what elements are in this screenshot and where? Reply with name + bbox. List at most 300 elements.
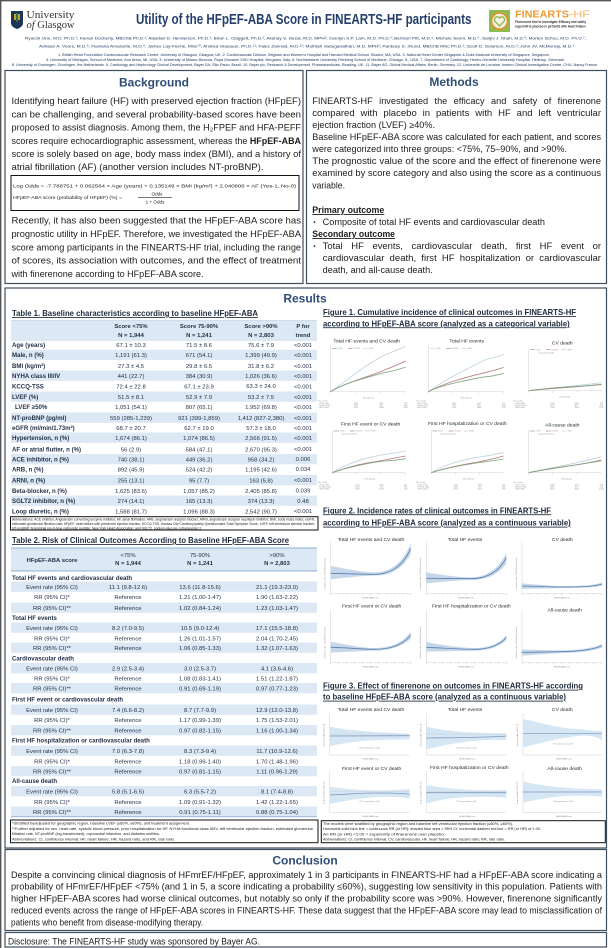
panel: disclosure: Disclosure: The FINEARTS-HF study was sponsored by Bayer AG. — [8, 936, 260, 946]
table 1: baseline characteristics: 892 (45.9) — [118, 468, 144, 474]
chart: first HF event or CV death: HFpEF-ABA score — [363, 815, 380, 818]
chart: total HF events and CV death: HFpEF-ABA score — [363, 758, 380, 761]
table 1: baseline characteristics: AF or atrial flutter, n (%) — [12, 446, 81, 453]
panel: results — [5, 288, 606, 848]
chart: all-cause death: >90% — [567, 430, 572, 433]
chart: total HF events: 1015 — [501, 407, 507, 409]
table 2: risk of clinical outcomes: 75-90% — [190, 553, 211, 559]
chart: first HF hospitalization or CV death: First HF hospitalization or CV death — [428, 421, 507, 427]
chart: total HF events and CV death: 498 — [404, 405, 408, 407]
affiliations: 4. University of Michigan, School of Medicine, Ann Arbor, MI, USA. 5. University of Milano-Bicocca, Papa Giovanni XXIII Hospital, Bergamo, Italy. 6. Northwestern University Feinberg School of Medicine, Chicago, IL, USA. 7. Department of Cardiology, Herlev-Gentofte University Hospital, Hellerup, Denmark. — [46, 58, 565, 62]
chart: total HF events and CV death: 1153 — [354, 405, 359, 407]
table 2: risk of clinical outcomes: 1.18 (0.99-1.40) — [179, 759, 221, 765]
logo: University of Glasgow: of Glasgow — [26, 19, 75, 31]
chart: first HF event or CV death: First HF event or CV death — [342, 766, 402, 772]
title: Utility of the HFpEF-ABA Score in FINEARTS-HF participants — [136, 12, 472, 28]
table 2: risk of clinical outcomes: N = 2,803 — [264, 561, 291, 567]
chart: all-cause death: Incidence rate (/ 100 Patient-Years) — [515, 627, 518, 658]
text block: conclusion: Despite a convincing clinical diagnosis of HFmrEF/HFpEF, approximately 1 in 3 participants in FINEARTS-HF had a HFpEF-ABA score indicating a — [11, 870, 602, 880]
chart: all-cause death: HFpEF-ABA score — [554, 666, 571, 669]
table 1: baseline characteristics: 1,057 (85.2) — [183, 489, 215, 495]
chart: first HF hospitalization or CV death: Log-rank p<0.001 — [440, 433, 456, 436]
text block: methods description: The prognostic value of the score and the effect of finerenone were — [312, 156, 601, 166]
table 2: risk of clinical outcomes: 0.91 (0.69-1.19) — [179, 687, 221, 693]
table 1: baseline characteristics: LVEF (%) — [12, 394, 38, 401]
table 2: risk of clinical outcomes: 1.16 (1.00-1.34) — [256, 728, 298, 734]
table 2 footnote: filtration rate, NT-proBNP (log-transformed), myocardial infarction, and diabetes mellitus. — [12, 832, 160, 836]
chart: first HF hospitalization or CV death: 799 — [502, 488, 506, 490]
table 2: risk of clinical outcomes: Reference — [114, 769, 142, 775]
table 1: baseline characteristics: ACE inhibitor, n (%) — [12, 457, 69, 464]
formula box: Odds — [152, 192, 163, 196]
chart: CV death: Time (years) — [559, 396, 571, 399]
chart: all-cause death: 1060 — [599, 488, 604, 490]
chart: first HF event or CV death: P for interaction = 0.90 — [360, 800, 381, 803]
table 2: risk of clinical outcomes: 8.3 (7.3-9.4) — [184, 749, 216, 755]
text block: conclusion: patients who benefit from disease-modifying therapy. — [11, 917, 203, 927]
figure 1 title — [323, 307, 576, 328]
table 1: baseline characteristics: <0.001 — [294, 436, 312, 442]
table 2: risk of clinical outcomes: 1.11 (0.96-1.29) — [256, 769, 298, 775]
table 2: risk of clinical outcomes: First HF hospitalization or cardiovascular death — [12, 737, 150, 744]
table 2: risk of clinical outcomes: Reference — [114, 595, 142, 601]
table 2: risk of clinical outcomes: 5.8 (5.1-6.5) — [112, 790, 144, 796]
text block: primary outcome: Primary outcome — [312, 205, 384, 215]
figure 3 title: to baseline HFpEF-ABA score (analyzed as a continuous variable) — [323, 692, 566, 702]
table 2: risk of clinical outcomes: 21.1 (19.3-23.0) — [256, 585, 298, 591]
table 2: risk of clinical outcomes: RR (95% CI)* — [34, 677, 71, 683]
formula box: 1 + Odds — [146, 200, 165, 204]
table 2: risk of clinical outcomes: Event rate (95% CI) — [26, 667, 78, 673]
chart: CV death: 1153 — [550, 405, 555, 407]
table 1: baseline characteristics: <0.001 — [294, 353, 312, 359]
chart: first HF event or CV death: 392 — [404, 486, 407, 488]
table 1: baseline characteristics: Score >90% — [244, 324, 278, 330]
table 1: baseline characteristics: ARNI, n (%) — [12, 478, 45, 485]
chart: all-cause death: <75% — [535, 430, 541, 433]
chart: first HF hospitalization or CV death: 2291 — [453, 488, 458, 490]
chart: all-cause death: 75-90% — [551, 431, 558, 433]
table 2: risk of clinical outcomes: All-cause death — [12, 778, 57, 785]
chart: first HF hospitalization or CV death: Time (years) — [462, 478, 474, 481]
table 2: risk of clinical outcomes: Total HF events and cardiovascular death — [12, 575, 132, 582]
table 1: baseline characteristics: 72.4 ± 22.8 — [116, 385, 146, 391]
text block: background intro: scores require echocardiographic assessment, whereas the HFpEF-ABA — [12, 136, 302, 146]
table 2: risk of clinical outcomes: RR (95% CI)* — [34, 595, 71, 601]
chart: first HF hospitalization or CV death: <75% 1944 — [417, 483, 428, 486]
chart: all-cause death — [514, 423, 604, 490]
chart: total HF events and CV death: Treatment effect (95% CI) — [323, 724, 326, 747]
table 1: baseline characteristics: N = 2,803 — [248, 333, 275, 339]
text block: methods description: were categorized into three groups: <75%, 75–90%, and >90%. — [311, 144, 567, 154]
chart: first HF event or CV death: >90% — [370, 430, 376, 433]
chart: all-cause death: No. at risk — [514, 481, 523, 484]
chart: total HF events: >90% — [467, 347, 472, 350]
table 2: risk of clinical outcomes: 0.97 (0.77-1.23) — [256, 687, 298, 693]
table 2: risk of clinical outcomes: 1.17 (0.99-1.39) — [179, 718, 221, 724]
table 1: baseline characteristics: 807 (65.1) — [186, 405, 212, 411]
chart: total HF events: Total HF events — [448, 707, 483, 713]
table 1: baseline characteristics: 75.6 ± 7.9 — [248, 343, 274, 349]
table 2: risk of clinical outcomes: HFpEF-ABA score — [27, 558, 78, 564]
table 1: baseline characteristics: 0.48 — [297, 499, 309, 505]
chart: CV death: <75% — [535, 348, 541, 351]
table 1: baseline characteristics: <0.001 — [294, 364, 312, 370]
table 1: baseline characteristics: <0.001 — [294, 478, 312, 484]
table 2: risk of clinical outcomes: 1.75 (1.53-2.01) — [256, 718, 298, 724]
table 2: risk of clinical outcomes: Event rate (95% CI) — [26, 626, 78, 632]
table 1: baseline characteristics: LVEF ≥50% — [15, 404, 48, 411]
table 2: risk of clinical outcomes: N = 1,944 — [115, 561, 142, 567]
table 2: risk of clinical outcomes: Event rate (95% CI) — [26, 708, 78, 714]
chart: total HF events: <75% 1944 — [417, 402, 428, 405]
text block: conclusion: probability of HFmrEF/HFpEF <75% (and 1 in 5, a score indicating a probability ≤60%), suggesting low sensitivity in this population. Patients with — [11, 882, 602, 892]
figure 3 title: Figure 3. Effect of finerenone on outcomes in FINEARTS-HF according — [323, 681, 583, 691]
figure 3: effect of finerenone — [321, 681, 605, 843]
table 1: baseline characteristics: Beta-blocker, n (%) — [12, 488, 67, 495]
chart: CV death: CV death — [552, 707, 573, 713]
chart: CV death: P for interaction = 0.93 — [553, 742, 574, 745]
chart: first HF hospitalization or CV death: Incidence rate (/ 100 Patient-Years) — [419, 627, 422, 658]
formula box: Log Odds = -7.788751 + 0.062564 × Age (years) + 0.135149 × BMI (kg/m²) + 2.040806 × AF (Yes-1, No-0) — [13, 184, 297, 188]
text block: primary outcome — [312, 205, 545, 227]
figure 2 charts — [323, 537, 603, 669]
table 1: baseline characteristics: 2,405 (85.8) — [245, 489, 277, 495]
figure 3 charts — [323, 707, 602, 818]
table 1 footnote: estimated glomerular filtration rate; HFpEF, heart failure with preserved ejection fraction; KCCQ-TSS, Kansas City Cardiomyopathy Questionnaire-Total Symptom Score; LVEF, left ventricular ejection fraction; — [12, 522, 315, 526]
table 2: risk of clinical outcomes: RR (95% CI)** — [33, 728, 72, 734]
chart: first HF event or CV death: 75-90% 1241 — [319, 486, 331, 488]
chart: total HF events and CV death: >90% — [368, 347, 374, 350]
chart: first HF event or CV death: Incidence rate (/ 100 Patient-Years) — [323, 627, 326, 658]
table 1: baseline characteristics: <0.001 — [294, 405, 312, 411]
chart: CV death: >90% 2803 — [515, 406, 526, 409]
chart: first HF event or CV death: Time (years) — [364, 478, 376, 481]
heading: methods: Methods — [429, 75, 479, 89]
chart: total HF events and CV death: Total HF events and CV death — [338, 537, 404, 543]
table 2: risk of clinical outcomes: Reference — [114, 646, 142, 652]
chart: first HF hospitalization or CV death: 75-90% 1241 — [417, 486, 429, 488]
chart: CV death: >90% — [567, 348, 572, 351]
table 1 footnote: Abbreviations: ACE inhibitor, Angiotensin converting enzyme inhibitor; AF, atrial fibrillation; ARB, angiotensin receptor blocker; ARNI, angiotensin receptor neprilysin inhibitor; BMI, body mass index; eGFR, — [12, 518, 315, 522]
chart: first HF hospitalization or CV death: No. at risk — [416, 481, 425, 484]
table 1: baseline characteristics: <0.001 — [294, 343, 312, 349]
table 1: baseline characteristics: Male, n (%) — [12, 352, 44, 359]
text block: secondary outcome: Total HF events, cardiovascular death, first HF event or — [323, 241, 601, 251]
table 2: risk of clinical outcomes: RR (95% CI)** — [33, 810, 72, 816]
chart: CV death: HFpEF-ABA score — [556, 758, 573, 761]
chart: first HF event or CV death — [323, 604, 411, 669]
table 2: risk of clinical outcomes: Reference — [114, 728, 142, 734]
logo: University of Glasgow: University — [26, 9, 75, 21]
table 2: risk of clinical outcomes: RR (95% CI)* — [34, 718, 71, 724]
chart: first HF event or CV death: 641 — [404, 484, 407, 486]
table 2: risk of clinical outcomes: 13.6 (11.8-15.6) — [179, 585, 221, 591]
logo: FINEARTS-HF: FINEARTS — [515, 10, 569, 20]
table 1: baseline characteristics: 374 (13.3) — [248, 499, 274, 505]
chart: all-cause death: All-cause death — [545, 423, 580, 429]
table 1 footnote — [10, 517, 318, 530]
table 1: baseline characteristics: 255 (13.1) — [118, 479, 144, 485]
chart: all-cause death: All-cause death — [547, 766, 582, 772]
chart: first HF hospitalization or CV death: >90% 2803 — [417, 487, 428, 490]
table 2: risk of clinical outcomes: 7.4 (6.6-8.2) — [112, 708, 144, 714]
figure 3 footnote: The models were stratified by geographic region and baseline left ventricular ejection fraction (≤60%, ≥60%). — [323, 822, 513, 826]
chart: total HF events and CV death: Time (years) — [362, 397, 374, 400]
table 1: baseline characteristics: 1,399 (49.9) — [245, 353, 277, 359]
table 2: risk of clinical outcomes: Total HF events — [12, 615, 58, 622]
text block: methods description: Baseline HFpEF-ABA score was calculated for each patient, and scores — [312, 132, 602, 142]
chart: total HF events: HFpEF-ABA score — [459, 758, 476, 761]
chart: total HF events: Incidence rate (/ 100 Patient-Years) — [419, 558, 422, 589]
table 2: risk of clinical outcomes: 8.2 (7.0-9.5) — [112, 626, 144, 632]
table 2: risk of clinical outcomes: 1.42 (1.22-1.65) — [256, 800, 298, 806]
table 2: risk of clinical outcomes: 1.23 (1.03-1.47) — [256, 606, 298, 612]
figure 1 title: according to HFpEF-ABA score (analyzed as a categorical variable) — [323, 318, 570, 328]
table 1: baseline characteristics: 67.1 ± 23.9 — [184, 385, 214, 391]
table 2 footnote: *Stratified by/adjusted for geographic region, baseline LVEF (≥60%, ≥60%), and treatment assignment. — [12, 822, 190, 826]
chart: CV death: 1810 — [550, 403, 555, 405]
chart: total HF events and CV death — [319, 338, 409, 409]
chart: first HF hospitalization or CV death: HFpEF-ABA score — [459, 815, 476, 818]
table 1: baseline characteristics: 524 (42.2) — [186, 468, 212, 474]
text block: background aim: prognostic utility in HFpEF. Therefore, we investigated the HFpEF-ABA — [12, 229, 301, 239]
table 1: baseline characteristics: 51.5 ± 8.1 — [118, 395, 144, 401]
chart: first HF hospitalization or CV death: 408 — [502, 486, 506, 488]
table 2: risk of clinical outcomes: 7.0 (6.3-7.8) — [112, 749, 144, 755]
chart: first HF hospitalization or CV death: First HF hospitalization or CV death — [430, 765, 509, 771]
chart: all-cause death: 75-90% 1241 — [515, 486, 526, 488]
chart: all-cause death: Log-rank p<0.001 — [538, 433, 554, 436]
text block: background aim: score among participants in the FINEARTS-HF trial, including the range — [12, 243, 301, 253]
heading: results: Results — [283, 292, 327, 306]
chart: first HF hospitalization or CV death: 1749 — [453, 484, 459, 486]
table 1: baseline characteristics: 67.1 ± 10.3 — [116, 343, 146, 349]
table 2: risk of clinical outcomes: Event rate (95% CI) — [26, 585, 78, 591]
text block: secondary outcome: death, and all-cause death. — [323, 265, 433, 275]
chart: total HF events: 1810 — [452, 403, 457, 405]
chart: total HF events: HFpEF-ABA score — [458, 597, 475, 600]
chart: total HF events: 897 — [477, 405, 481, 407]
logo: FINEARTS-HF — [489, 10, 590, 32]
table 1: baseline characteristics: 1,026 (36.6) — [245, 374, 277, 380]
table 2: risk of clinical outcomes: First HF event or cardiovascular death — [12, 697, 123, 704]
table 1: baseline characteristics: 163 (5.8) — [249, 479, 273, 485]
chart: total HF events — [419, 707, 506, 761]
chart: first HF event or CV death: <75% 1944 — [319, 483, 330, 486]
chart: first HF event or CV death: 750 — [404, 488, 408, 490]
table 1: baseline characteristics: trend — [296, 333, 311, 339]
chart: CV death: CV death — [552, 341, 573, 347]
table 1: baseline characteristics: <0.001 — [294, 509, 312, 515]
authors: Ryuichi Ono, M.D. Ph.D.¹; Kieran Docherty, MBChB Ph.D.¹; Alasdair D. Henderson, Ph.D.¹; Brian L. Claggett, Ph.D.²; Akshay S. Desai, M.D. MPH²; Carolyn S.P. Lam, M.D. Ph.D.³; Bertram Pitt, M.D.⁴; Michele Senni, M.D.⁵; Sanjiv J. Shah, M.D.⁶; Morten Schou, M.D. Ph.D.⁷; — [25, 36, 586, 40]
chart: first HF event or CV death: Log-rank p<0.001 — [341, 433, 357, 436]
chart: total HF events and CV death: 1015 — [403, 407, 409, 409]
chart: total HF events and CV death: P for interaction = 0.85 — [360, 747, 381, 750]
table 1: baseline characteristics: 31.8 ± 6.2 — [248, 364, 274, 370]
table 2: risk of clinical outcomes: <75% — [120, 553, 136, 559]
chart: first HF event or CV death: Treatment effect (95% CI) — [323, 781, 326, 804]
authors — [25, 36, 586, 48]
panel: methods — [306, 70, 606, 284]
table 1: baseline characteristics: NT-proBNP (pg/ml) — [12, 415, 66, 422]
chart: all-cause death: 516 — [600, 486, 604, 488]
table 1: baseline characteristics: 1,674 (86.1) — [115, 436, 147, 442]
chart: all-cause death: 1943 — [574, 488, 580, 490]
table 1: baseline characteristics: <0.001 — [294, 426, 312, 432]
chart: total HF events — [417, 338, 507, 409]
chart: CV death: Incidence rate (/ 100 Patient-Years) — [515, 558, 518, 589]
table 1: baseline characteristics: 0.006 — [296, 457, 311, 463]
text block: methods description: examined by score category and also using the score as a continuous — [312, 168, 602, 178]
table 1: baseline characteristics: 671 (54.1) — [186, 353, 212, 359]
chart: CV death: No. at risk — [514, 399, 523, 402]
chart: total HF events and CV death: 2516 — [353, 407, 359, 409]
table 2: risk of clinical outcomes: 17.1 (15.5-18.8) — [256, 626, 298, 632]
chart: total HF events: 75-90% 1241 — [417, 405, 428, 407]
chart: first HF hospitalization or CV death: P for interaction = 0.87 — [456, 800, 476, 803]
chart: total HF events and CV death: No. at risk — [319, 399, 328, 402]
chart: total HF events and CV death: 75-90% — [353, 348, 360, 350]
figure 3 footnote: Horizontal solid blue line = continuous RR (or HR); shaded blue area = 95% CI; horizontal dashed red line = RR (or HR) of 1.00. — [323, 827, 541, 831]
table 1: baseline characteristics: 95 (7.7) — [189, 479, 209, 485]
table 1: baseline characteristics: <0.001 — [294, 447, 312, 453]
table 1: baseline characteristics: Hypertension, n (%) — [12, 435, 69, 442]
table 1: baseline characteristics: 559 (285-1,239) — [110, 416, 152, 422]
chart: total HF events: 776 — [502, 403, 506, 405]
chart: total HF events: >90% 2803 — [417, 406, 428, 409]
table 2 footnote: **Further adjusted for sex, heart rate, systolic blood pressure, prior hospitalization for HF, NYHA functional class III/IV, left ventricular ejection fraction, estimated glomerular — [12, 827, 314, 831]
text block: methods description: ejection fraction (LVEF) ≥40%. — [312, 120, 435, 130]
table 2: risk of clinical outcomes: 10.5 (9.0-12.4) — [181, 626, 219, 632]
chart: total HF events: 498 — [502, 405, 506, 407]
table 1: baseline characteristics: BMI (kg/m²) — [12, 363, 45, 370]
heading: conclusion: Conclusion — [272, 854, 338, 868]
chart: total HF events: 1401 — [477, 403, 481, 405]
table 2: risk of clinical outcomes: Reference — [114, 677, 142, 683]
chart: all-cause death: >90% 2803 — [515, 487, 526, 490]
chart: total HF events: <75% — [435, 347, 441, 350]
table 1: baseline characteristics: 0.034 — [296, 467, 311, 473]
chart: total HF events: Total HF events — [448, 537, 483, 543]
table 2: risk of clinical outcomes: 1.21 (1.00-1.47) — [179, 595, 221, 601]
table 1: baseline characteristics: 1,588 (81.7) — [115, 510, 147, 516]
table 1: baseline characteristics: eGFR (ml/min/1.73m²) — [12, 425, 75, 432]
figure 1 title: Figure 1. Cumulative incidence of clinical outcomes in FINEARTS-HF — [323, 307, 576, 317]
table 2: risk of clinical outcomes: 1.51 (1.22-1.87) — [256, 677, 298, 683]
table 1: baseline characteristics: <0.001 — [294, 416, 312, 422]
table 1: baseline characteristics: Score 75-90% — [180, 324, 219, 330]
panel: conclusion — [5, 850, 606, 930]
chart: total HF events: 2516 — [452, 407, 457, 409]
text block: methods description — [311, 96, 602, 191]
table 1: baseline characteristics: 71.5 ± 8.6 — [186, 343, 213, 349]
chart: all-cause death: 1860 — [550, 484, 555, 486]
table 2: risk of clinical outcomes: >90% — [269, 553, 285, 559]
table 1: baseline characteristics: 958 (34.2) — [248, 458, 274, 464]
chart: first HF hospitalization or CV death: 1591 — [477, 488, 482, 490]
chart: total HF events and CV death: 1810 — [353, 403, 359, 405]
chart: CV death: 75-90% 1241 — [515, 405, 526, 407]
panel: disclosure — [5, 932, 606, 947]
table 1: baseline characteristics: 63.3 ± 24.0 — [246, 384, 276, 390]
table 1: baseline characteristics: 57.3 ± 18.0 — [246, 426, 276, 432]
chart: all-cause death: P for interaction = 0.94 — [553, 800, 574, 803]
table 1: baseline characteristics: NYHA class III/IV — [12, 373, 61, 380]
chart: CV death — [515, 537, 603, 600]
table 2 footnote — [10, 820, 318, 843]
formula box — [11, 176, 299, 210]
table 2: risk of clinical outcomes: 3.0 (2.5-3.7) — [184, 667, 216, 673]
table 2: risk of clinical outcomes — [11, 535, 317, 817]
chart: first HF hospitalization or CV death: HFpEF-ABA score — [458, 666, 475, 669]
table 2: risk of clinical outcomes: 1.06 (0.85-1.33) — [179, 646, 221, 652]
figure 2 title: Figure 2. Incidence rates of clinical outcomes in FINEARTS-HF — [323, 505, 551, 515]
table 1: baseline characteristics: 68.7 ± 20.7 — [116, 426, 146, 432]
table 2: risk of clinical outcomes: 0.97 (0.82-1.15) — [179, 728, 221, 734]
table 1: baseline characteristics: 0.039 — [296, 488, 310, 494]
chart: total HF events and CV death: <75% — [337, 347, 343, 350]
text block: background intro — [12, 96, 302, 172]
panel: background — [5, 70, 303, 284]
table 1: baseline characteristics: KCCQ-TSS — [12, 384, 44, 391]
table 1 footnote: NT-proBNP, N-terminal pro-b-type natriuretic peptide; New York Heart Association; and SGLT2, sodium-glucose cotransporter 2. — [12, 526, 202, 530]
table 1: baseline characteristics: 1,195 (42.6) — [245, 468, 277, 474]
table 2: risk of clinical outcomes: RR (95% CI)** — [33, 769, 72, 775]
chart: first HF hospitalization or CV death: <75% — [438, 430, 443, 433]
figure 3 footnote — [321, 821, 605, 843]
table 1: baseline characteristics: 1,952 (69.8) — [245, 405, 277, 411]
table 1: baseline characteristics: N = 1,241 — [186, 333, 213, 339]
text block: secondary outcome: cardiovascular death, first HF hospitalization or cardiovascular — [323, 253, 601, 263]
chart: CV death — [514, 341, 604, 409]
table 2: risk of clinical outcomes: 11.1 (9.8-12.6) — [109, 585, 147, 591]
chart: first HF hospitalization or CV death — [419, 765, 509, 818]
table 1: baseline characteristics: N = 1,944 — [118, 333, 145, 339]
table 1 title: Table 1. Baseline characteristics according to baseline HFpEF-ABA — [12, 308, 258, 318]
chart: CV death: 776 — [600, 403, 604, 405]
table 2: risk of clinical outcomes: Reference — [114, 718, 142, 724]
table 2: risk of clinical outcomes: 1.09 (0.91-1.32) — [179, 800, 221, 806]
authors: Adriaan A. Voors, M.D.⁸; Flaviana Amarante, M.D.⁹; James Lay-Flurrie, MSc¹⁰; Andrea Glasauer, Ph.D.¹¹; Faiez Zannad, M.D.¹²; Muthiah Vaduganathan, M.D. MPH²; Pardeep S. Jhund, MBChB MSc Ph.D.¹; Scott D. Solomon, M.D.²; John JV. McMurray, M.D.¹ — [39, 44, 575, 48]
table 2: risk of clinical outcomes: Reference — [114, 759, 142, 765]
chart: total HF events: 1153 — [452, 405, 457, 407]
chart: total HF events and CV death: 897 — [380, 405, 383, 407]
table 1: baseline characteristics: 1,191 (61.3) — [115, 353, 147, 359]
table 1: baseline characteristics: 384 (30.9) — [186, 374, 212, 380]
table 2: risk of clinical outcomes: Event rate (95% CI) — [26, 790, 78, 796]
chart: total HF events and CV death: <75% 1944 — [319, 402, 330, 405]
table 2: risk of clinical outcomes: 2.9 (2.5-3.4) — [112, 667, 144, 673]
chart: CV death: 75-90% — [551, 349, 558, 351]
table 2: risk of clinical outcomes: RR (95% CI)* — [34, 800, 71, 806]
chart: first HF event or CV death: 756 — [380, 486, 384, 488]
chart: all-cause death: 1182 — [550, 486, 554, 488]
text block: secondary outcome — [312, 229, 601, 275]
text block: background aim: with finerenone according to HFpEF-ABA score. — [10, 269, 203, 279]
chart: first HF hospitalization or CV death: 1098 — [453, 486, 459, 488]
chart: first HF event or CV death: First HF event or CV death — [342, 604, 402, 610]
table 1: baseline characteristics — [11, 308, 317, 516]
table 2: risk of clinical outcomes: 1.26 (1.01-1.57) — [179, 636, 221, 642]
text block: methods description: variable. — [312, 181, 345, 191]
chart: all-cause death: 799 — [600, 484, 604, 486]
chart: total HF events — [419, 537, 507, 600]
chart: total HF events: Treatment effect (95% CI) — [419, 724, 422, 747]
chart: first HF event or CV death: 75-90% — [355, 431, 362, 433]
table 2 footnote: Abbreviations: CI, confidence interval; HF, heart failure; HR, hazard ratio; and RR, rate ratio. — [12, 837, 175, 841]
table 2: risk of clinical outcomes: 0.97 (0.81-1.15) — [179, 769, 221, 775]
